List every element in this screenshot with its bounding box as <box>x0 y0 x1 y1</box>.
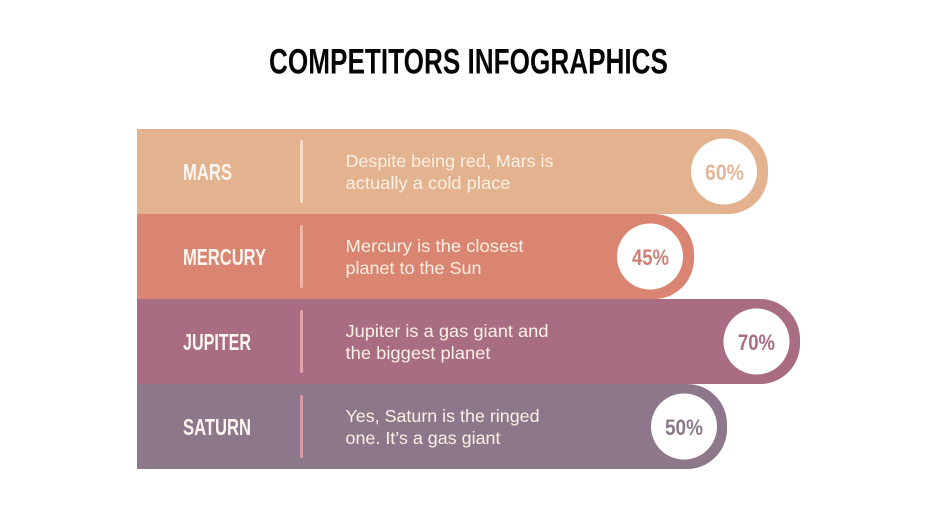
bar: Mercury <box>137 214 694 299</box>
percentage badge: 60%: 60% <box>705 160 744 185</box>
label: Mars: MARS <box>183 159 232 185</box>
bar: Mars <box>137 129 768 214</box>
bar: Saturn <box>137 384 727 469</box>
percentage badge: 45%: 45% <box>632 245 669 270</box>
description: Mars: Despite being red, Mars is <box>346 151 554 171</box>
label: Mercury: MERCURY <box>183 244 266 270</box>
title: COMPETITORS INFOGRAPHICS <box>269 42 668 82</box>
panel: Jupiter row <box>137 299 800 384</box>
percentage badge: 70%: 70% <box>738 330 775 355</box>
percentage badge: 50% <box>651 394 717 460</box>
panel: Mars row <box>137 129 768 214</box>
panel: Saturn row <box>137 384 727 469</box>
divider: Jupiter <box>300 310 303 373</box>
bar: Jupiter <box>137 299 800 384</box>
panel: Mercury row <box>137 214 694 299</box>
description: Mercury: planet to the Sun <box>346 258 482 278</box>
percentage badge: 45% <box>617 224 683 290</box>
divider: Mars <box>300 140 303 203</box>
divider: Saturn <box>300 395 303 458</box>
description: Jupiter: the biggest planet <box>346 343 491 363</box>
description: Saturn: Yes, Saturn is the ringed <box>346 406 540 426</box>
label: Jupiter: JUPITER <box>183 329 251 355</box>
divider: Mercury <box>300 225 303 288</box>
description: Mars: actually a cold place <box>346 173 510 193</box>
percentage badge: 60% <box>691 138 757 204</box>
description: Saturn: one. It’s a gas giant <box>346 428 501 448</box>
percentage badge: 70% <box>724 308 790 374</box>
description: Mercury: Mercury is the closest <box>346 236 524 256</box>
description: Jupiter: Jupiter is a gas giant and <box>346 321 548 341</box>
label: Saturn: SATURN <box>183 414 251 440</box>
percentage badge: 50%: 50% <box>665 415 703 440</box>
